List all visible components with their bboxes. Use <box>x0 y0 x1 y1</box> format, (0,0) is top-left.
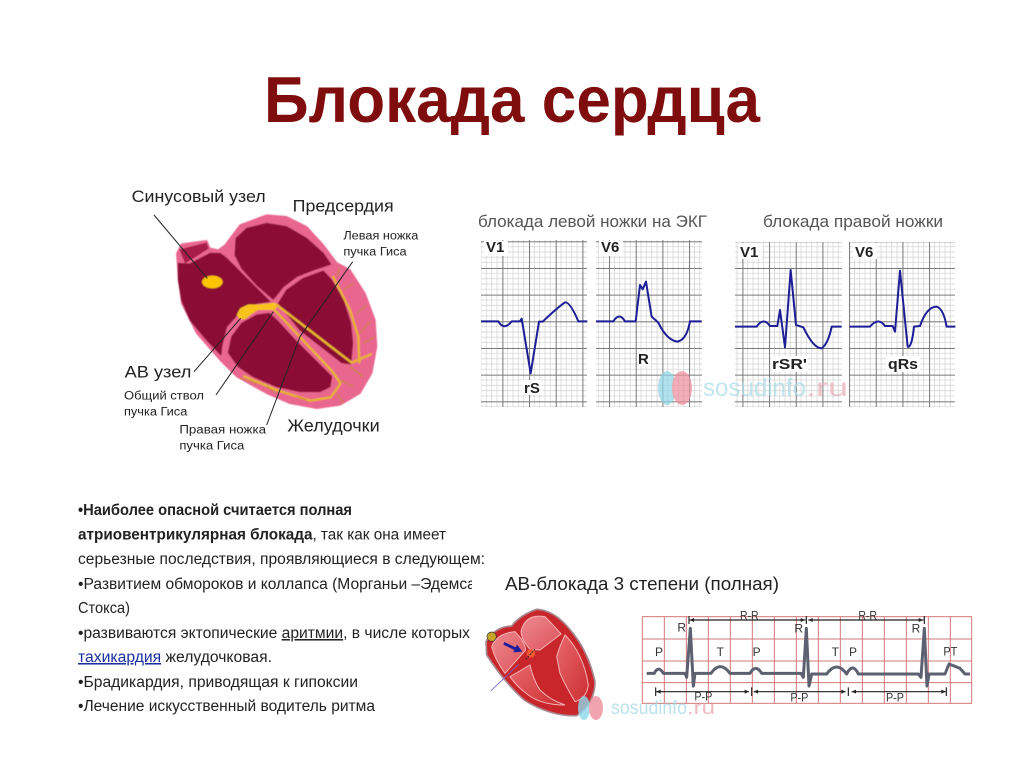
watermark: top <box>658 371 848 405</box>
small heart wall <box>486 609 595 716</box>
heart labels: Предсердия <box>293 196 394 215</box>
bullet list line 8: •Брадикардия, приводящая к гипоксии <box>78 674 358 691</box>
ecg labels: right bundle: rSR' <box>772 356 807 373</box>
watermark: top: sosudinfo <box>703 374 806 402</box>
ecg labels: left bundle: V1 <box>486 239 504 256</box>
wave labels: R <box>912 621 921 635</box>
heart labels: пучка Гиса <box>124 405 188 419</box>
heart wall <box>177 215 377 408</box>
AV node <box>237 303 278 319</box>
watermark: bottom: sosudinfo <box>611 698 687 719</box>
wave labels: T <box>717 645 725 659</box>
wave labels: R <box>794 621 803 635</box>
lower left chamber <box>510 665 565 705</box>
heart labels: Левая ножка <box>343 228 418 242</box>
ecg labels: left bundle <box>484 239 651 397</box>
pointer lines <box>154 215 353 425</box>
lower right chamber <box>557 635 588 702</box>
av block heading: АВ-блокада 3 степени (полная) <box>505 573 779 594</box>
heart labels: пучка Гиса <box>179 438 244 452</box>
ecg labels: right bundle: qRs <box>888 356 918 373</box>
left bundle heading: блокада левой ножки на ЭКГ <box>478 212 707 231</box>
right ventricle chamber <box>228 313 332 392</box>
ecg grid panels: left bundle <box>481 240 702 407</box>
wave labels: P-P <box>790 691 808 705</box>
bullet list line 1: •Наиболее опасной считается полная <box>78 502 352 519</box>
bullet list line 7: тахикардия желудочковая. <box>78 649 272 666</box>
heart labels: АВ узел <box>125 363 191 382</box>
bullet list line 3: серьезные последствия, проявляющиеся в следующем: <box>78 551 485 568</box>
ecg chart: third degree block <box>642 608 972 705</box>
bullet list line 2: атриовентрикулярная блокада, так как она имеет <box>78 526 446 544</box>
ecg labels: right bundle <box>738 243 920 373</box>
wave labels <box>655 608 958 705</box>
upper left chamber <box>492 632 526 673</box>
right atrium chamber <box>178 253 270 355</box>
blocked node <box>527 649 535 658</box>
upper right chamber <box>521 616 561 650</box>
ecg labels: right bundle: V6 <box>855 244 873 261</box>
ecg traces: left bundle <box>481 282 702 373</box>
wave labels: T <box>832 645 840 659</box>
bullet list line 6: •развиваются эктопические аритмии, в числе которых <box>78 625 470 642</box>
wave labels: P <box>655 645 663 659</box>
heart body <box>177 215 377 408</box>
small heart illustration <box>486 609 595 716</box>
ecg labels: left bundle: R <box>638 351 649 368</box>
bullet list line 5: Стокса) <box>78 600 130 617</box>
heart labels: Желудочки <box>287 416 380 436</box>
sinus node <box>487 632 496 641</box>
heart labels: Общий ствол <box>124 388 204 402</box>
watermark: top: .ru <box>806 374 848 402</box>
heart conduction diagram <box>124 187 418 452</box>
watermark: bottom <box>578 696 715 720</box>
wave labels: P <box>753 645 761 659</box>
bullet list line 4: •Развитием обмороков и коллапса (Морганьи –Эдемса- <box>78 576 481 593</box>
wave labels: P-P <box>694 690 712 704</box>
wave labels: R-R <box>740 608 759 622</box>
watermark: bottom: .ru <box>687 698 715 719</box>
heart labels: пучка Гиса <box>343 244 407 258</box>
ecg traces: right bundle <box>735 270 955 348</box>
ecg grid panels: right bundle <box>735 242 955 407</box>
wave labels: PT <box>943 644 958 658</box>
left atrium chamber <box>235 223 331 299</box>
sinus node <box>202 276 223 288</box>
bundle branches <box>243 276 372 401</box>
wave labels: R <box>677 621 686 635</box>
purple pointer <box>491 664 519 691</box>
interval arrows <box>656 616 946 696</box>
blue arrow <box>503 642 522 652</box>
right bundle heading: блокада правой ножки <box>763 212 943 231</box>
body text <box>78 502 485 715</box>
ecg labels: right bundle: V1 <box>740 244 758 261</box>
wave labels: R-R <box>858 608 877 622</box>
ecg labels: left bundle: V6 <box>601 239 619 256</box>
heart labels <box>124 187 418 452</box>
wave labels: P-P <box>886 691 904 705</box>
wave labels: P <box>849 645 857 659</box>
chart grid <box>642 617 972 703</box>
left ventricle chamber <box>278 271 353 364</box>
bullet list line 9: •Лечение искусственный водитель ритма <box>78 698 375 715</box>
heart labels: Синусовый узел <box>132 187 266 206</box>
title: Блокада сердца <box>264 63 761 136</box>
ecg trace <box>647 628 970 686</box>
ecg labels: left bundle: rS <box>524 380 540 397</box>
heart labels: Правая ножка <box>179 422 266 436</box>
vessel opening <box>179 243 209 263</box>
